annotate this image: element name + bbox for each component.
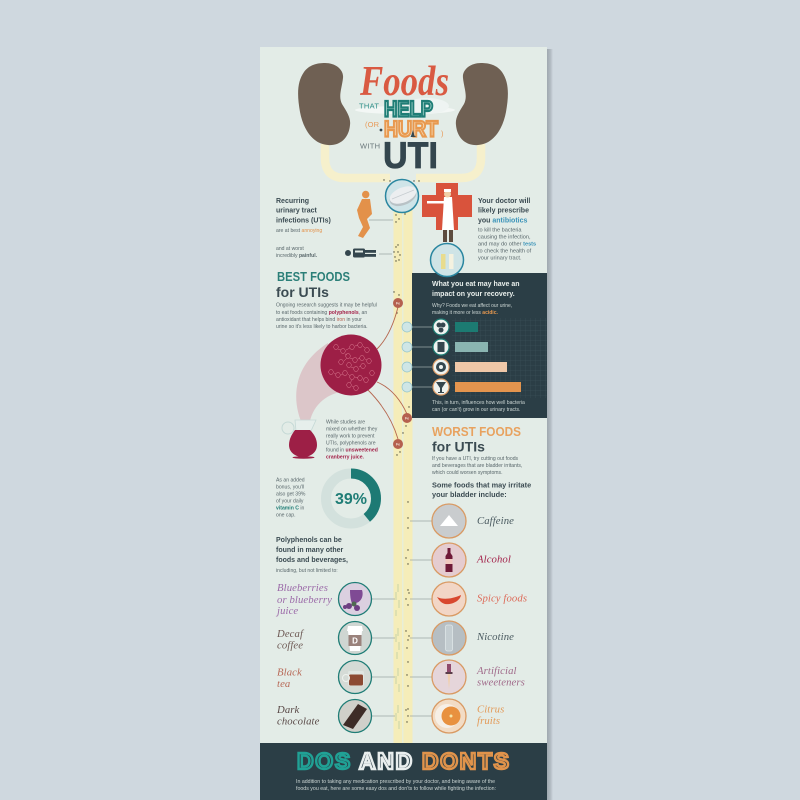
text: recurring UTIs: incredibly painful. [276, 253, 318, 259]
text: cranberry studies: really work to prevent [326, 434, 375, 440]
heading: worst foods: WORST FOODS [432, 425, 521, 439]
text: polyphenols list intro [276, 537, 348, 574]
text: ongoing research: to eat foods containing polyphenols, an [276, 310, 367, 316]
text: doctor prescribes: likely prescribe [478, 208, 529, 214]
panel: recovery [412, 273, 547, 418]
recovery heading [432, 281, 520, 298]
item: decaf coffee [276, 622, 372, 654]
heading: dos and donts: DOS AND DONTS [297, 748, 509, 774]
item: decaf coffee: D [352, 636, 358, 646]
recovery heading: What you eat may have an [432, 281, 520, 288]
item: artificial sweeteners: sweeteners [477, 676, 525, 688]
text: polyphenols list intro: foods and beverages, [276, 557, 348, 564]
item: dark chocolate: Dark [276, 704, 300, 716]
item: spicy foods: Spicy foods [477, 592, 527, 604]
item: artificial sweeteners: Artificial [476, 665, 517, 677]
heading: worst foods: for UTIs [432, 438, 485, 454]
item: citrus fruits [432, 699, 504, 733]
iron markers [393, 298, 412, 449]
item: blueberries: juice [275, 605, 298, 617]
item: decaf coffee: coffee [277, 640, 303, 652]
text: recurring UTIs: are at best annoying [276, 228, 322, 234]
plume from pitcher [296, 343, 340, 428]
text: cranberry studies: mixed on whether they [326, 426, 378, 432]
text: vitamin c: one cap. [276, 512, 296, 518]
text: bladder irritants: your bladder include: [432, 490, 507, 499]
item: nicotine [432, 621, 514, 655]
title: HURT [384, 116, 438, 142]
recovery footer text [432, 400, 525, 413]
icon: test tubes magnifier [430, 244, 464, 276]
item: citrus fruits: fruits [477, 715, 500, 727]
text: doctor prescribes: and may do other tests [478, 242, 536, 248]
text: recurring UTIs: Recurring [276, 198, 309, 205]
donut chart: 39% [326, 474, 376, 524]
heading: worst foods [432, 425, 521, 454]
title: THAT [359, 102, 379, 110]
text: doctor prescribes [478, 198, 536, 262]
title: UTI [383, 135, 438, 176]
text: doctor prescribes: Your doctor will [478, 198, 530, 205]
item: artificial sweeteners [432, 660, 525, 694]
recovery intro text [432, 303, 512, 316]
title: (OR [365, 120, 380, 129]
text: polyphenols list intro: found in many other [276, 547, 344, 554]
bacteria marks in tube [383, 179, 420, 723]
dos and donts intro [296, 779, 496, 792]
recovery footer text: This, in turn, influences how well bacteria [432, 400, 525, 406]
text: recurring UTIs: urinary tract [276, 208, 318, 214]
item: nicotine: Nicotine [476, 631, 514, 643]
title: Foods [359, 59, 449, 105]
heading: best foods: for UTIs [276, 284, 329, 300]
text: doctor prescribes: you antibiotics [478, 218, 528, 224]
item: blueberries: or blueberry [277, 594, 332, 606]
title: HELP [384, 96, 433, 122]
polyphenol molecule [320, 334, 382, 396]
text: doctor prescribes: causing the infection, [478, 234, 531, 240]
title: ) [441, 129, 444, 138]
item: citrus fruits: Citrus [477, 704, 504, 716]
text: recurring UTIs: and at worst [276, 246, 304, 252]
recovery intro text: making it more or less acidic. [432, 310, 498, 316]
text: polyphenols list intro: Polyphenols can be [276, 537, 342, 544]
icon: pill magnifier [386, 180, 419, 212]
icon: person in pain [357, 191, 372, 238]
text: recurring UTIs: infections (UTIs) [276, 218, 331, 224]
item: black tea [277, 660, 372, 694]
item: caffeine [432, 504, 514, 538]
text: vitamin c: As an added [276, 478, 305, 484]
dos and donts intro: foods you eat, here are some easy dos and don'ts to follow while fighting the infection: [296, 786, 496, 792]
item: spicy foods [432, 582, 527, 616]
item: blueberries: Blueberries [277, 582, 328, 594]
iron markers: Fe [405, 416, 409, 420]
dos and donts intro: In addition to taking any medication prescribed by your doctor, and being aware of the [296, 779, 495, 785]
kidney left [298, 63, 350, 145]
text: ongoing research: antioxidant that helps bind iron in your [276, 317, 362, 323]
kidney right [456, 63, 508, 145]
text: bladder irritants: Some foods that may irritate [432, 480, 531, 490]
text: vitamin c: of your daily [276, 498, 304, 504]
title: WITH [360, 142, 380, 150]
urinary tubes [325, 144, 481, 745]
acid level icons [402, 319, 449, 395]
icon: doctor with red cross [422, 183, 472, 242]
text: cranberry studies: While studies are [326, 420, 365, 426]
icon: person lying down [345, 248, 376, 258]
text: doctor prescribes: your urinary tract. [478, 256, 522, 262]
recovery footer text: can (or can't) grow in our urinary tracts. [432, 407, 520, 413]
text: bladder irritants: which could worsen symptoms. [432, 470, 502, 476]
title [355, 59, 455, 176]
item: black tea: Black [277, 666, 302, 678]
iron markers: Fe [396, 302, 400, 306]
icon: cranberry pitcher [282, 420, 317, 459]
text: cranberry studies: cranberry juice. [326, 454, 365, 460]
text: cranberry studies [326, 420, 378, 460]
text: bladder irritants: and beverages that are bladder irritants, [432, 463, 522, 469]
iron connectors [368, 307, 407, 439]
text: ongoing research [276, 302, 377, 330]
iron markers: Fe [396, 442, 400, 446]
text: bladder irritants: If you have a UTI, try cutting out foods [432, 456, 519, 462]
text: doctor prescribes: to kill the bacteria [478, 228, 522, 234]
text: cranberry studies: found in unsweetened [326, 448, 378, 454]
text: ongoing research: Ongoing research suggests it may be helpful [276, 302, 377, 308]
panel: dos and donts [260, 743, 547, 800]
text: ongoing research: urine so it's less likely to harbor bacteria. [276, 324, 368, 330]
recovery intro text: Why? Foods we eat affect our urine, [432, 303, 512, 309]
text: vitamin c: also get 39% [276, 492, 306, 498]
bar chart [455, 322, 521, 392]
heading: best foods: BEST FOODS [277, 270, 350, 284]
text: recurring UTIs [276, 198, 331, 259]
green marks in tube [396, 584, 399, 729]
connector lines [369, 220, 432, 716]
text: doctor prescribes: to check the health of [478, 248, 532, 254]
item: dark chocolate: chocolate [277, 716, 320, 728]
item: decaf coffee: Decaf [276, 628, 305, 640]
poster background [260, 47, 547, 800]
item: alcohol [432, 543, 511, 577]
text: polyphenols list intro: including, but not limited to: [276, 568, 338, 574]
text: vitamin c [276, 478, 306, 518]
heading: best foods [276, 270, 350, 300]
item: black tea: tea [277, 678, 290, 690]
item: alcohol: Alcohol [476, 554, 511, 566]
text: bladder irritants [432, 456, 531, 499]
item: blueberries [275, 582, 372, 617]
text: vitamin c: vitamin C in [276, 506, 304, 512]
text: cranberry studies: UTIs, polyphenols are [326, 440, 376, 446]
recovery heading: impact on your recovery. [432, 291, 515, 298]
donut chart: 39%: 39% [335, 491, 367, 508]
item: dark chocolate [276, 700, 372, 732]
item: caffeine: Caffeine [477, 515, 514, 527]
text: vitamin c: bonus, you'll [276, 484, 304, 490]
